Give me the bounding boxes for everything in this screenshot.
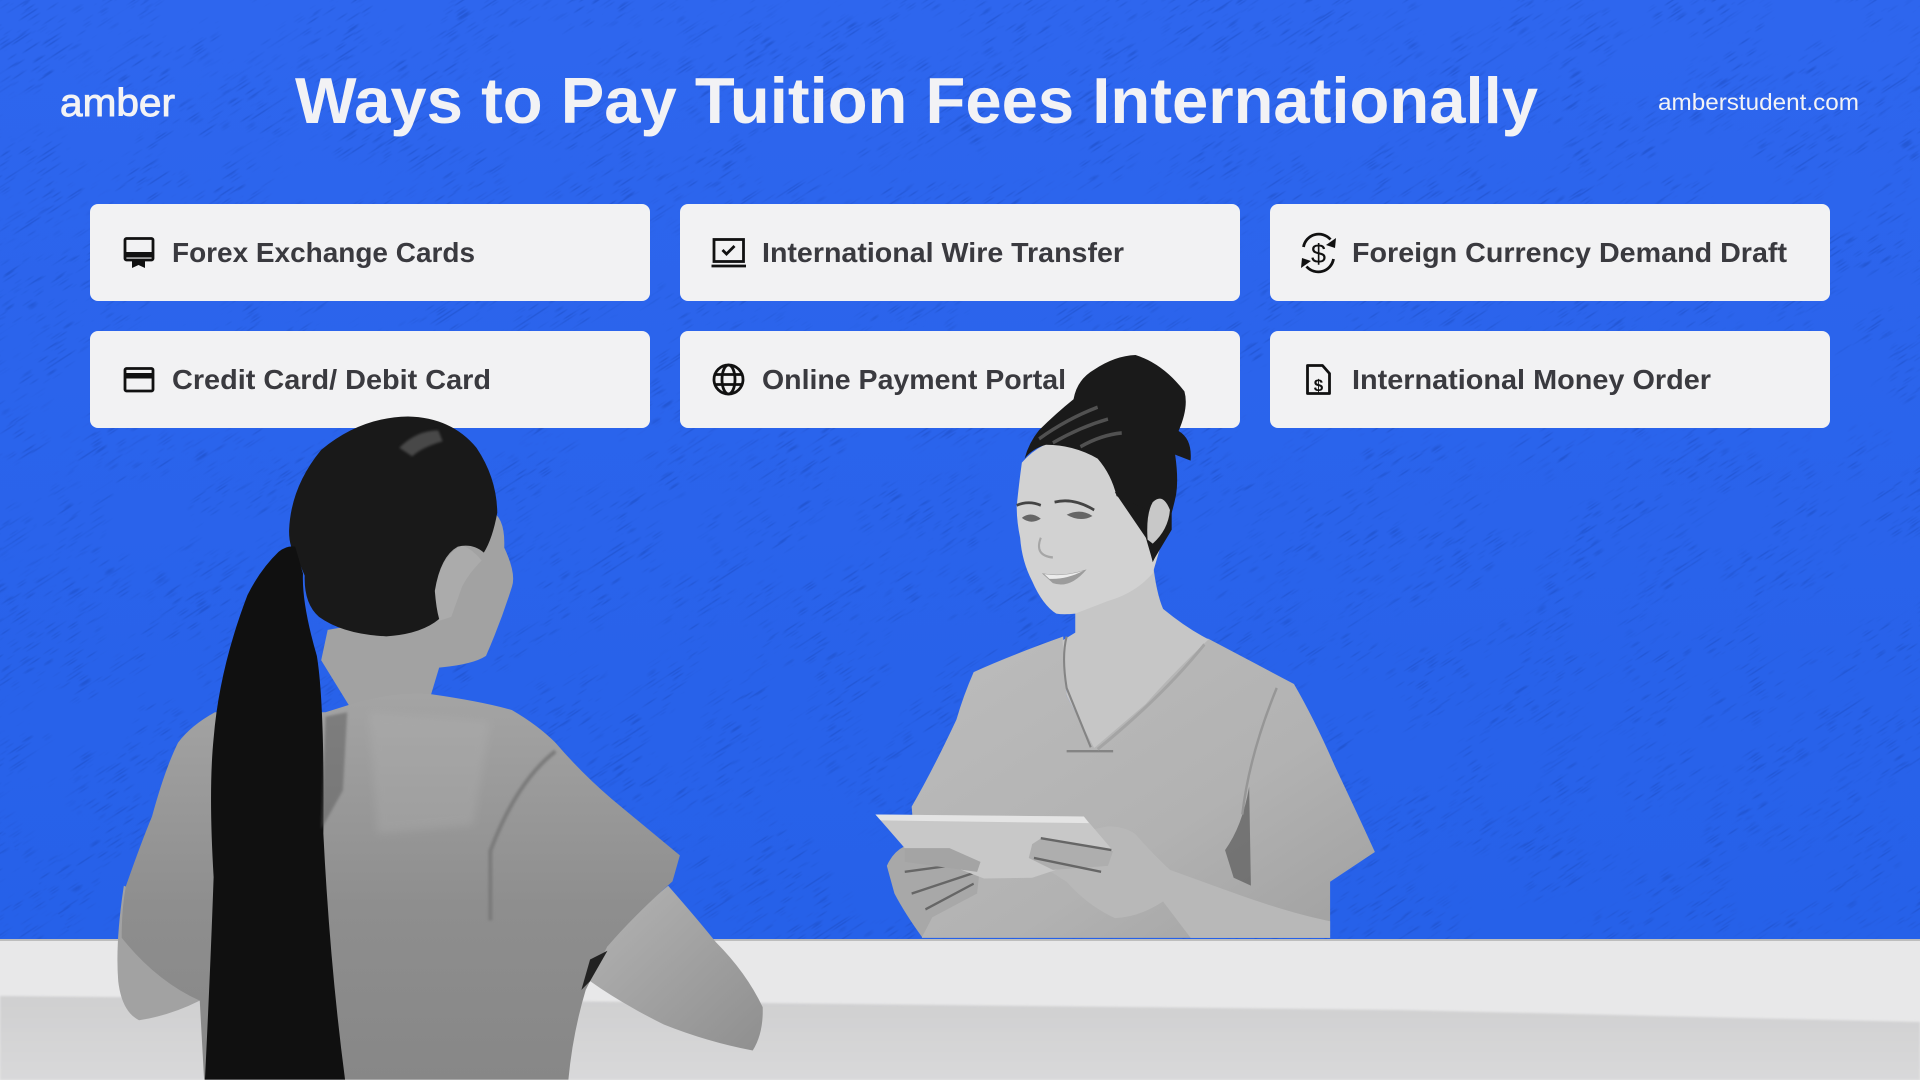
sleeve cuff shadow xyxy=(581,951,607,990)
icon: forex certificate card xyxy=(125,238,153,268)
card: Foreign Currency Demand Draft xyxy=(1270,204,1830,301)
ear xyxy=(435,545,482,621)
nose shade and mouth xyxy=(1039,538,1053,557)
card: Forex Exchange Cards xyxy=(90,204,650,301)
label: International Money Order xyxy=(1352,364,1711,395)
right arm xyxy=(590,886,763,1051)
shirt xyxy=(912,637,1375,938)
face xyxy=(1017,440,1163,614)
sleeve seam xyxy=(490,751,555,920)
hair xyxy=(289,416,497,636)
collar line xyxy=(1064,637,1113,751)
sleeve seam xyxy=(1242,688,1277,814)
label: Foreign Currency Demand Draft xyxy=(1352,237,1787,268)
card: International Money Order xyxy=(1270,331,1830,428)
label: Online Payment Portal xyxy=(762,364,1066,395)
underarm shadow xyxy=(1225,787,1251,886)
hair behind ear xyxy=(1115,486,1172,561)
icon: currency exchange xyxy=(1301,234,1336,272)
logo: amber: amber xyxy=(60,82,175,125)
tablet xyxy=(875,814,1113,879)
ear xyxy=(1147,499,1170,544)
counter xyxy=(0,939,1920,1080)
icon: document with dollar: $ xyxy=(1314,376,1324,395)
left arm xyxy=(117,886,204,1020)
hair highlights xyxy=(1039,407,1122,447)
photo: woman at counter with tablet xyxy=(875,355,1375,938)
label: Credit Card/ Debit Card xyxy=(172,364,491,395)
strand over neck xyxy=(321,712,347,829)
card: Credit Card / Debit Card xyxy=(90,331,650,428)
V-neck seam xyxy=(1098,644,1204,749)
label: Forex Exchange Cards xyxy=(172,237,475,268)
neck and face xyxy=(321,511,513,717)
icon: laptop with check xyxy=(712,240,746,266)
icon: document with dollar xyxy=(1308,366,1330,395)
card: International Wire Transfer xyxy=(680,204,1240,301)
left hand xyxy=(887,846,981,937)
icon: currency exchange: $ xyxy=(1311,239,1326,269)
title: Ways to Pay Tuition Fees Internationally xyxy=(295,64,1538,137)
shirt highlight xyxy=(369,712,490,834)
eyes and brows xyxy=(1017,501,1094,510)
hair and bun xyxy=(1025,355,1191,562)
icon: globe xyxy=(714,365,743,394)
photo: woman seen from behind with ponytail xyxy=(117,416,763,1080)
label: International Wire Transfer xyxy=(762,237,1124,268)
ponytail xyxy=(205,546,345,1080)
card: Online Payment Portal xyxy=(680,331,1240,428)
website url: amberstudent.com xyxy=(1658,89,1859,115)
neck and chest xyxy=(1063,561,1209,748)
hair highlight xyxy=(399,430,443,456)
forearm and right hand xyxy=(1029,826,1330,938)
fingers over tablet xyxy=(905,848,981,872)
shirt xyxy=(122,694,680,1080)
icon: credit card xyxy=(125,368,153,391)
